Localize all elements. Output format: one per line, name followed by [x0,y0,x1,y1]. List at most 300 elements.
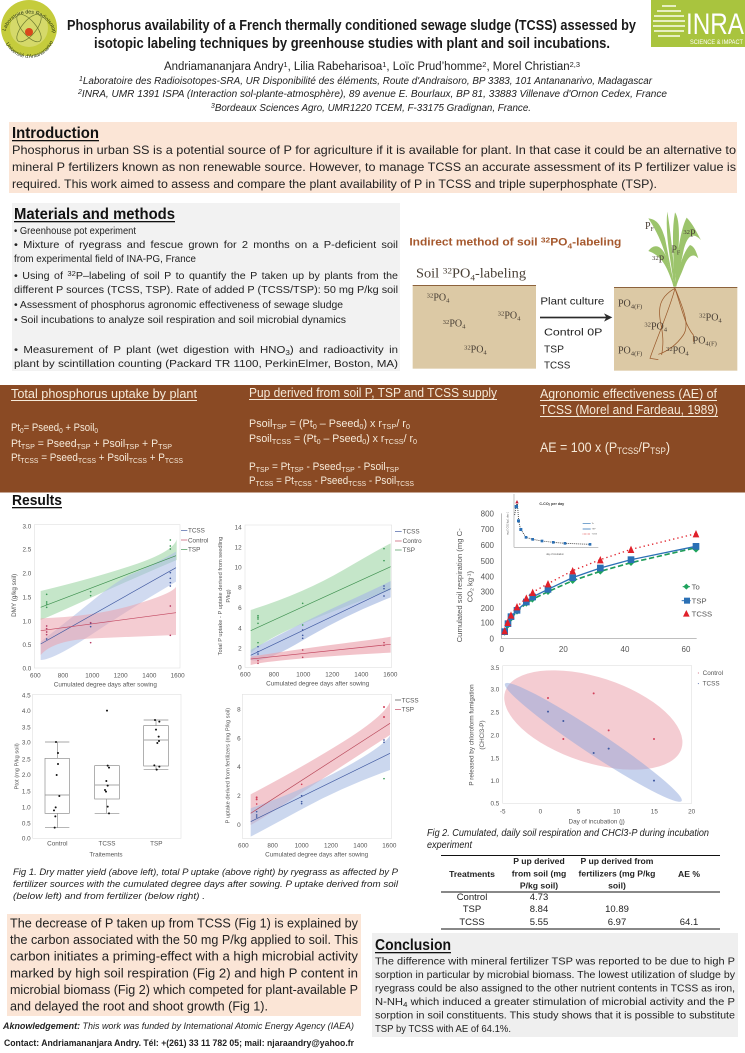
chart: P uptake from fertilizers: 600 [238,843,249,850]
soil before culture: PO [471,344,483,355]
column: total phosphorus uptake: 0 [94,426,98,435]
panel: materials and methods [12,203,400,371]
soil before culture: 4 [470,272,476,282]
soil after culture with plant: 4(F) [631,351,642,358]
panel: indirect labeling diagram [409,212,737,372]
table: treatments [441,855,720,930]
inset chart: C-CO2 per day [507,494,598,556]
text: methods list: P–labeling of soil P to quantify the P taken up by plants from the [76,270,398,282]
chart: dry matter yield: TCSS [188,528,205,535]
soil before culture: 32 [464,345,471,352]
soil after culture with plant: PO [651,321,664,332]
text: discussion body: The decrease of P taken up from TCSS (Fig 1) is explained by [10,916,359,930]
chart: Psoil boxplot: 0.5 [22,821,31,828]
chart: P uptake from fertilizers: 2 [237,793,241,800]
column: agronomic effectiveness [540,386,718,456]
chart: dry matter yield: Cumulated degree days after sowing [54,682,157,689]
column: total phosphorus uptake [11,386,197,465]
authors: , Lilia Rabeharisoa [288,61,383,73]
text: conclusion body: TSP by TCSS with AE of 64.1%. [375,1023,511,1035]
text: methods list: • Assessment of phosphorus agronomic effectiveness of sewage sludge [14,299,343,311]
chart: dry matter yield: 1400 [142,672,157,679]
column: agronomic effectiveness: Agronomic effectiveness (AE) of [540,386,717,401]
text: methods list: 32 [67,269,76,278]
heading: materials and methods: Materials and methods [14,206,175,223]
soil after culture with plant: P [645,221,651,232]
table: treatments: 6.97 [608,917,626,928]
chart: total P uptake: P/kg) [226,589,232,603]
text: discussion body: microbial biomass (Fig 2) which competed for plant-available P [10,983,358,997]
chart: P uptake from fertilizers: 4 [237,764,241,771]
soil after culture with plant: 32 [699,313,706,320]
logo: INRA [651,0,745,47]
chart: dry matter yield: 0.0 [23,665,32,672]
column: total phosphorus uptake: TSP [125,442,139,451]
chart: dry matter yield: 1000 [85,672,100,679]
soil after culture with plant: F [677,250,681,256]
inset chart: C-CO2 per day: C-CO [539,502,549,506]
chart: P uptake from fertilizers [226,694,419,858]
chart: P uptake from fertilizers: 1000 [295,843,309,850]
chart: cumulated soil respiration: 400 [481,572,495,581]
text: discussion body: the carbon associated with the 50 mg P/kg applied to soil. This [10,933,358,947]
column: P uptake derived from soil, TSP and TCSS: TCSS [294,479,312,488]
authors: 2 [482,60,486,69]
chart: Psoil boxplot: 2.5 [22,756,31,763]
chart: P uptake from fertilizers: 8 [237,706,241,713]
chart: Psoil boxplot: 3.5 [22,724,31,731]
table: treatments: P/kg soil) [520,880,558,890]
chart: Psoil boxplot: 1.5 [22,788,31,795]
chart: chloroform fumigation P: TCSS [703,681,720,688]
caption: figure 1: Fig 1. Dry matter yield (above left), total P uptake (above right) by ryegrass as affected by P [13,867,399,878]
chart: total P uptake: 1000 [296,672,311,679]
authors: 1 [382,60,386,69]
soil after culture with plant: 4(F) [705,341,717,348]
chart: Psoil boxplot: Ptot (mg P/kg soil) [15,743,21,789]
column: P uptake derived from soil, TSP and TCSS: = (Pt [291,433,317,445]
soil before culture: Soil [416,266,437,281]
chart: chloroform fumigation P: 5 [577,809,581,816]
column: total phosphorus uptake: TCSS [129,456,147,465]
chart: total P uptake: 800 [269,672,280,679]
chart: total P uptake: Total P uptake - P uptake derived from seedling [218,537,224,655]
chart: cumulated soil respiration: CO [466,591,475,602]
chart: cumulated soil respiration: 300 [481,588,495,597]
column: P uptake derived from soil, TSP and TCSS: 0 [362,437,366,446]
chart: total P uptake [218,524,422,687]
soil after culture with plant: P [690,229,696,240]
chart: chloroform fumigation P: 20 [688,809,696,816]
chart: dry matter yield: 2.0 [23,570,32,577]
chart: total P uptake: 1200 [325,672,340,679]
chart: cumulated soil respiration: 0 [490,635,495,644]
chart: P uptake from fertilizers: 6 [237,735,241,742]
chart: cumulated soil respiration: 20 [559,645,568,654]
soil after culture with plant: PO [618,346,631,357]
chart: Psoil boxplot: 4.0 [22,708,31,715]
chart: cumulated soil respiration: 700 [481,525,495,534]
affiliations: INRA, UMR 1391 ISPA (Interaction sol-plante-atmosphère), 89 avenue E. Bourlaux, BP 81, 33883 Villenave d'Ornon Cedex, France [82,89,667,100]
column: total phosphorus uptake: 0 [20,426,24,435]
inset chart: C-CO2 per day: 2 [549,503,551,507]
chart: chloroform fumigation P: 2.0 [491,732,500,739]
soil before culture: PO [504,310,517,321]
chart: chloroform fumigation P: 10 [613,809,621,816]
soil after culture with plant: 4(F) [631,303,642,310]
chart: P uptake from fertilizers: TSP [402,707,414,714]
chart: Psoil boxplot [15,693,181,858]
affiliations: 1 [79,76,83,83]
text: methods list: plant by scintillation counting (Packard TR 1100, PerkinElmer, Boston, MA) [14,358,398,370]
chart: cumulated soil respiration: -1 [467,573,473,578]
heading: introduction: Introduction [12,125,99,142]
soil after culture with plant: 4 [718,317,722,324]
column: P uptake derived from soil, TSP and TCSS: TSP [382,422,396,431]
table: treatments: TCSS [459,917,485,928]
arrow: plant culture: Plant culture [540,297,605,308]
chart: chloroform fumigation P: -5 [500,809,506,816]
chart: dry matter yield: 1200 [114,672,128,679]
text: discussion body [10,916,359,1014]
authors: 2,3 [570,60,580,69]
text: discussion body: and delayed the root and shoot growth (Fig 1). [10,1000,268,1014]
chart: dry matter yield: 1.5 [23,594,32,601]
chart: Psoil boxplot: Traitements [89,851,123,858]
chart: dry matter yield: TSP [188,547,200,554]
text: conclusion body: which induced a greater stimulation of microbial activity and the P [407,996,735,1008]
soil before culture: 32 [427,293,433,300]
caption: figure 1: (below left) and from fertilizer (below right) . [13,891,205,902]
column: agronomic effectiveness: ) [666,439,670,455]
chart: P uptake from fertilizers: 1200 [324,843,339,850]
inset chart: C-CO2 per day: To [592,523,595,525]
affiliations: Bordeaux Sciences Agro, UMR1220 TCEM, F-33175 Gradignan, France. [215,103,531,114]
soil after culture with plant: PO [618,298,631,309]
text: introduction body: required. This work aimed to assess and compare the plant availability of P in TCSS and triple superphosphate (TSP). [12,177,657,191]
text: methods list [14,225,398,370]
column: P uptake derived from soil, TSP and TCSS: Psoil [249,433,273,445]
panel: equations band [0,385,745,492]
text: methods list: from experimental field of INA-PG, France [14,253,196,265]
column: P uptake derived from soil, TSP and TCSS: Pup derived from soil P, TSP and TCSS supply [249,385,497,400]
table: treatments: AE % [678,869,700,879]
affiliations: 2 [77,89,82,96]
column: P uptake derived from soil, TSP and TCSS: TSP [290,465,304,474]
affiliations: Laboratoire des Radioisotopes-SRA, UR Disponibilité des éléments, Route d'Andraisoro, BP 3383, 101 Antananarivo, Madagascar [83,76,653,87]
column: total phosphorus uptake: + Psoil [90,438,125,450]
chart: chloroform fumigation P: Day of incubation (j) [569,819,625,826]
chart: total P uptake: 4 [238,625,242,632]
column: P uptake derived from soil, TSP and TCSS: - Psoil [366,475,396,487]
chart: cumulated soil respiration: ) [466,570,475,573]
column: total phosphorus uptake: TSP [158,442,172,451]
column: total phosphorus uptake: = Pseed [35,438,77,450]
chart: cumulated soil respiration: kg [466,578,475,588]
column: P uptake derived from soil, TSP and TCSS: – Pseed [321,433,362,445]
column: P uptake derived from soil, TSP and TCSS: TCSS [396,479,414,488]
soil after culture with plant: PO [673,346,685,357]
heading: indirect method: PO [550,237,568,249]
chart: total P uptake: 600 [240,672,251,679]
text: methods list: • Measurement of P plant (wet digestion with HNO [14,344,263,356]
chart: total P uptake: 1400 [354,672,369,679]
chart: P uptake from fertilizers: TCSS [402,697,419,704]
chart: cumulated soil respiration: 100 [481,619,495,628]
caption: figure 1 [13,867,399,902]
soil after culture with plant: F [651,227,655,233]
affiliations [77,76,667,114]
arrow: plant culture: Control 0P [544,327,602,338]
soil after culture with plant: 4 [685,351,689,358]
column: P uptake derived from soil, TSP and TCSS: 0 [317,437,321,446]
panel: conclusion [372,933,738,1037]
chart: total P uptake: 6 [238,605,242,612]
column: P uptake derived from soil, TSP and TCSS: - Pseed [312,475,348,487]
column: P uptake derived from soil, TSP and TCSS: = Pt [273,475,294,487]
chart: Psoil boxplot: 0.0 [22,835,31,842]
soil after culture with plant: PO [706,312,718,323]
chart: P uptake from fertilizers: 0 [237,822,241,829]
inset chart: C-CO2 per day: mg C-CO2 kg-1 day-1 [507,511,509,535]
arrow: plant culture [540,297,612,372]
column: P uptake derived from soil, TSP and TCSS: 0 [413,437,417,446]
caption: figure 2: Fig 2. Cumulated, daily soil respiration and CHCl3-P during incubation [427,828,709,839]
chart: chloroform fumigation P: 15 [651,809,658,816]
chart: chloroform fumigation P: 2.5 [491,709,500,716]
table: treatments: fertilizers (mg P/kg [579,868,655,878]
text: conclusion body: 4 [403,1000,407,1009]
chart: cumulated soil respiration: 2 [470,588,476,591]
chart: total P uptake: Cumulated degree days after sowing [266,680,370,687]
chart: cumulated soil respiration: Cumulated soil respiration (mg C- [455,528,464,642]
soil after culture with plant: 4 [664,326,668,333]
title [67,18,636,52]
chart: dry matter yield: Control [188,537,208,544]
inset chart: C-CO2 per day: TCSS [592,534,598,536]
column: total phosphorus uptake: Pt [11,452,21,464]
table: treatments: 64.1 [680,917,698,928]
column: total phosphorus uptake: TCSS [78,456,96,465]
column: total phosphorus uptake: Pt [11,438,21,450]
title: isotopic labeling techniques by greenhouse studies with plant and soil incubations. [94,36,610,52]
chart: total P uptake: 0 [238,664,242,671]
text: conclusion body: N-NH [375,996,401,1008]
chart: cumulated soil respiration: 500 [481,557,495,566]
column: P uptake derived from soil, TSP and TCSS: - Psoil [355,461,386,473]
chart: dry matter yield: 3.0 [23,524,32,531]
soil after culture with plant: 32 [644,322,651,329]
chart: chloroform fumigation P: 3.5 [491,665,500,672]
chart: dry matter yield: 1600 [171,672,185,679]
text: methods list: • Soil incubations to analyze soil respiration and soil microbial dynamics [14,314,346,326]
text: methods list: • Mixture of ryegrass and fescue grown for 2 months on a P-deficient soil [14,239,398,251]
text: introduction body [12,143,736,191]
soil before culture: PO [449,319,462,330]
column: P uptake derived from soil, TSP and TCSS: P [249,475,256,487]
chart: P uptake from fertilizers: 800 [267,843,278,850]
soil before culture: 4 [517,315,521,322]
column: P uptake derived from soil, TSP and TCSS: – Pseed [317,418,359,430]
column: total phosphorus uptake: + P [139,438,158,450]
chart: total P uptake: 12 [235,544,242,551]
soil before culture: 32 [443,319,449,326]
text: conclusion body: sorption in soil constituents. This study shows that it is possible to substitute [375,1010,735,1022]
column: agronomic effectiveness: TCSS (Morel and Fardeau, 1989) [540,402,718,417]
column: P uptake derived from soil, TSP and TCSS: TCSS [272,437,291,446]
chart: chloroform fumigation P: 1.5 [491,755,500,762]
column: total phosphorus uptake: Pt [11,422,21,434]
chart: chloroform fumigation P: 0 [539,809,543,816]
text: conclusion body: ryegrass could be also assigned to the other nutrient contents in TCSS as iron, [375,982,735,994]
text: methods list: ) and radioactivity in [290,344,398,356]
chart: P uptake from fertilizers: 1600 [382,843,397,850]
column: P uptake derived from soil, TSP and TCSS: / r [396,418,406,430]
column: P uptake derived from soil, TSP and TCSS: 0 [406,422,410,431]
column: P uptake derived from soil, TSP and TCSS [249,385,497,488]
chart: Psoil boxplot: 2.0 [22,772,31,779]
chart: cumulated soil respiration: 40 [621,645,630,654]
table: treatments: 5.55 [530,917,548,928]
panel: discussion [7,914,361,1016]
column: P uptake derived from soil, TSP and TCSS: Psoil [249,418,273,430]
column: P uptake derived from soil, TSP and TCSS: ) x r [366,433,385,445]
legend: respiration: To [692,582,700,591]
chart: chloroform fumigation P: 0.5 [491,801,500,808]
text: methods list: different P sources (TCSS, TSP). Rate of added P (TCSS/TSP): 50 mg P/kg soil [14,284,398,296]
table: treatments: TSP [463,904,481,915]
column: P uptake derived from soil, TSP and TCSS: 0 [359,422,363,431]
soil after culture with plant: 32 [652,255,659,262]
arrow: plant culture: TSP [544,344,564,355]
chart: chloroform fumigation P: P released by chloroform fumigation [468,684,475,786]
column: P uptake derived from soil, TSP and TCSS: TSP [272,422,287,431]
heading: indirect method: 4 [567,241,573,250]
chart: dry matter yield [11,524,208,689]
table: treatments: 4.73 [530,892,548,903]
text: discussion body: carbon initiates a priming-effect with a high microbial activity [10,950,359,964]
column: agronomic effectiveness: TSP [650,446,666,456]
table: treatments: P up derived [513,856,565,866]
chart: cumulated soil respiration: 800 [481,509,495,518]
inset chart: C-CO2 per day: day of incubation [546,553,565,556]
chart: total P uptake: 10 [235,564,242,571]
soil after culture with plant: PO [693,336,705,347]
column: P uptake derived from soil, TSP and TCSS: TSP [256,465,269,474]
column: agronomic effectiveness: TCSS [617,446,639,456]
column: total phosphorus uptake: TSP [77,442,90,451]
chart: cumulated soil respiration: 0 [499,645,504,654]
chart: dry matter yield: 800 [58,672,69,679]
text: conclusion body: The difference with mineral fertilizer TSP was reported to be due to high P [375,956,735,968]
chart: cumulated soil respiration: 60 [682,645,691,654]
chart: dry matter yield: 0.5 [23,642,32,649]
column: total phosphorus uptake: Total phosphorus uptake by plant [11,386,197,401]
soil before culture [413,266,536,369]
authors: Andriamananjara Andry [164,61,284,73]
soil before culture: -labeling [475,266,526,281]
chart: cumulated soil respiration: 600 [481,541,495,550]
chart: dry matter yield: 600 [30,672,41,679]
column: P uptake derived from soil, TSP and TCSS: TSP [341,465,355,474]
chart: total P uptake: TCSS [403,529,420,536]
chart: dry matter yield: 1.0 [23,618,32,625]
column: agronomic effectiveness: /P [639,439,650,455]
column: P uptake derived from soil, TSP and TCSS: TCSS [256,479,273,488]
column: P uptake derived from soil, TSP and TCSS: ) x r [363,418,382,430]
chart: total P uptake: 14 [235,524,242,531]
arrow: plant culture: TCSS [544,361,570,372]
chart: Psoil boxplot: 3.0 [22,740,31,747]
soil before culture: PO [433,292,446,303]
chart: chloroform fumigation P [468,651,723,826]
column: total phosphorus uptake: = Pseed [24,422,59,434]
chart: total P uptake: 8 [238,584,242,591]
soil after culture with plant: P [671,244,677,255]
table: treatments: from soil (mg [512,868,566,878]
column: total phosphorus uptake: + P [147,452,165,464]
caption: figure 2: experiment [427,840,473,851]
logo: laboratory: Université d'Antananarivo [6,41,53,58]
chart: total P uptake: Contro [403,538,422,545]
column: total phosphorus uptake: TCSS [20,456,38,465]
text: discussion body: marked by high soil respiration (Fig 2) and high P content in [10,966,358,980]
heading: indirect method: -labeling [572,237,621,249]
table: treatments: soil) [608,880,626,890]
caption: figure 1: fertilizer sources with the cumulated degree days after sowing. P uptake derived from soil [13,879,399,890]
text: methods list: 3 [285,348,290,357]
table: treatments: 10.89 [605,904,629,915]
logo: laboratory [1,0,57,58]
text: conclusion body: sorption in particular by microbial biomass. The lowest utilization of sludge by [375,969,736,981]
chart: total P uptake: 2 [238,645,242,652]
chart: chloroform fumigation P: Control [703,670,723,677]
legend: respiration: TSP [692,596,707,605]
chart: chloroform fumigation P: 3.0 [491,687,500,694]
chart: Psoil boxplot: Control [47,841,68,848]
heading: results: Results [12,493,62,509]
inset chart: C-CO2 per day: TSP [592,529,596,531]
soil after culture with plant: 32 [683,229,690,236]
chart: total P uptake: 1600 [383,672,398,679]
heading: indirect method: Indirect method of soil [409,237,527,249]
column: P uptake derived from soil, TSP and TCSS: TCSS [348,479,366,488]
text: methods list: • Greenhouse pot experiment [14,225,136,237]
table: treatments: P up derived from [581,856,654,866]
column: total phosphorus uptake: 0 [59,426,63,435]
text: conclusion body [375,956,736,1035]
column: P uptake derived from soil, TSP and TCSS: = (Pt [287,418,313,430]
chart: cumulated soil respiration: 200 [481,604,495,613]
column: P uptake derived from soil, TSP and TCSS: / r [404,433,413,445]
legend: respiration: TCSS [692,609,712,618]
column: P uptake derived from soil, TSP and TCSS: TCSS [384,437,404,446]
soil before culture: PO [452,266,471,281]
affiliations: 3 [211,103,215,110]
table: treatments: Control [457,892,487,903]
column: P uptake derived from soil, TSP and TCSS: P [249,461,256,473]
soil after culture with plant: P [659,255,665,266]
text: methods list: • Using of [14,270,62,282]
table: treatments: Treatments [449,869,495,879]
soil before culture: 4 [483,349,487,356]
heading: conclusion: Conclusion [375,937,451,954]
chart: P uptake from fertilizers: P uptake derived from fertilizers (mg P/kg soil) [226,708,232,823]
chart: P uptake from fertilizers: 1400 [353,843,368,850]
column: total phosphorus uptake: = Pseed [38,452,78,464]
chart: chloroform fumigation P: 1.0 [491,778,500,785]
text: contact: Contact: Andriamananjara Andry. Tél: +(261) 33 11 782 05; mail: njaraandry@yahoo.fr [4,1038,354,1049]
